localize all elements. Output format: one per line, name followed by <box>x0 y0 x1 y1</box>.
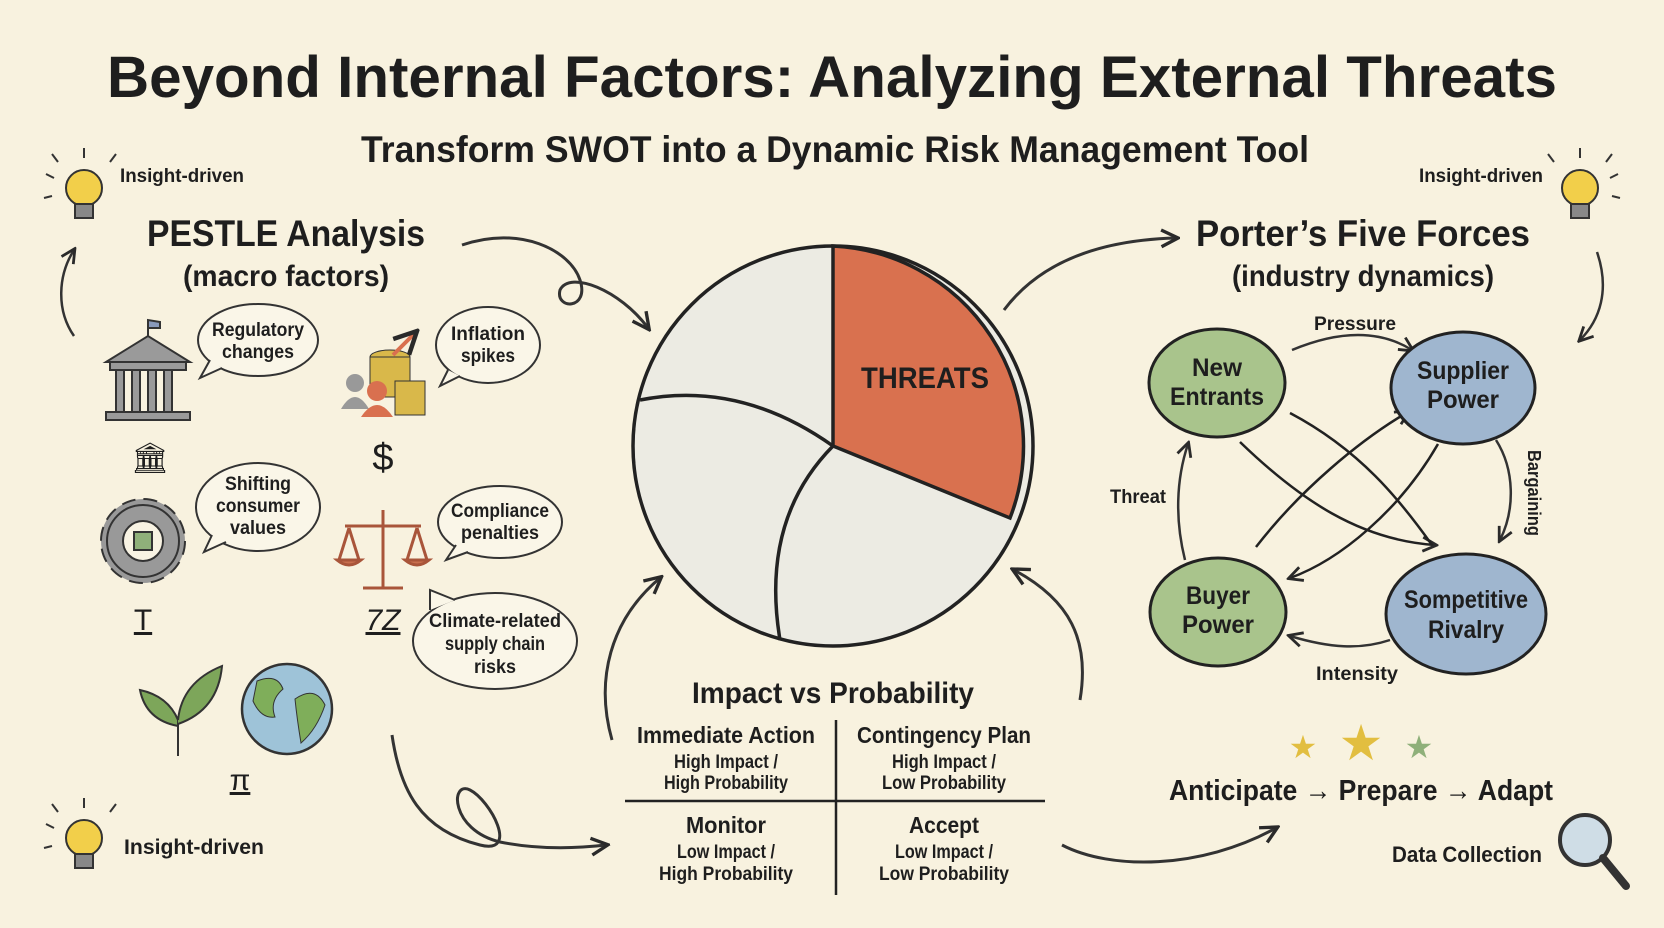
chart: SWOT circle: THREATS <box>861 362 989 395</box>
icon: globe <box>242 664 332 754</box>
arrow: left side up <box>61 250 74 336</box>
callout: regulatory: changes <box>222 342 294 363</box>
node: buyer power: Buyer <box>1186 582 1250 610</box>
icon: stars: ★ <box>1405 729 1433 765</box>
icon: bulb bottom-left <box>44 798 116 868</box>
chart: SWOT circle <box>633 246 1033 646</box>
node: buyer power: Power <box>1182 611 1254 639</box>
icon: coins and people <box>341 333 425 417</box>
heading: PESTLE: PESTLE Analysis <box>147 213 425 254</box>
panel: impact vs probability matrix: High Probability <box>659 864 793 885</box>
callout: regulatory <box>198 304 318 378</box>
arrow: circle to porter <box>1004 238 1176 310</box>
heading: PESTLE: (macro factors) <box>183 260 389 293</box>
node: new entrants <box>1149 329 1285 437</box>
callout: inflation spikes: spikes <box>461 346 515 367</box>
icon: stars: ★ <box>1339 715 1383 771</box>
callout: compliance: penalties <box>461 523 539 544</box>
node: new entrants: New <box>1192 354 1243 382</box>
heading: PESTLE <box>147 213 425 293</box>
callout: compliance: Compliance <box>451 501 549 522</box>
panel: impact vs probability matrix <box>625 677 1045 895</box>
callout: shifting consumer values <box>196 463 320 552</box>
icon: government building <box>106 320 190 420</box>
arrow: lower right up into circle <box>1014 570 1082 700</box>
panel: impact vs probability matrix: Low Probability <box>882 773 1006 794</box>
icon: bulb top-right <box>1548 148 1620 218</box>
panel: impact vs probability matrix: High Probability <box>664 773 788 794</box>
node: new entrants: Entrants <box>1170 383 1264 411</box>
callout: shifting consumer values: consumer <box>216 496 301 517</box>
icon: T symbol: T <box>134 604 152 637</box>
callout: climate: risks <box>474 657 516 678</box>
node: supplier power: Power <box>1427 386 1499 414</box>
icon: small building: 🏛 <box>131 442 169 475</box>
diagram: five forces: Bargaining <box>1524 450 1544 536</box>
panel: impact vs probability matrix: Low Impact / <box>677 842 776 863</box>
callout: climate <box>413 590 577 689</box>
callout: inflation spikes: Inflation <box>451 324 525 345</box>
node: supplier power <box>1391 332 1535 444</box>
panel: impact vs probability matrix: Low Impact / <box>895 842 994 863</box>
icon: law symbol: 7Z <box>365 604 402 637</box>
panel: impact vs probability matrix: Low Probability <box>879 864 1009 885</box>
icon: dollar: $ <box>372 437 394 479</box>
panel: impact vs probability matrix: Monitor <box>686 812 766 838</box>
diagram: five forces: Threat <box>1110 487 1167 508</box>
callout: shifting consumer values: values <box>230 518 286 539</box>
text: data collection: Data Collection <box>1392 842 1542 867</box>
diagram: five forces <box>1110 314 1546 685</box>
heading: porter: (industry dynamics) <box>1232 260 1494 293</box>
panel: impact vs probability matrix: High Impact / <box>892 752 997 773</box>
callout: climate: Climate-related <box>429 611 561 632</box>
title: Beyond Internal Factors: Analyzing External Threats <box>107 45 1557 110</box>
panel: impact vs probability matrix: Accept <box>909 812 979 838</box>
icon: pi symbol: π <box>230 764 250 797</box>
icon: stars: ★ <box>1289 729 1317 765</box>
panel: impact vs probability matrix: Immediate Action <box>637 722 815 748</box>
text: anticipate prepare adapt: Anticipate → Prepare → Adapt <box>1169 775 1553 807</box>
panel: impact vs probability matrix: High Impact / <box>674 752 779 773</box>
icon: gear <box>101 499 185 583</box>
arrow: right side down <box>1580 252 1603 340</box>
icon: leaves <box>140 666 222 756</box>
callout: compliance <box>438 486 562 560</box>
text: insight-driven top-right: Insight-driven <box>1419 166 1543 187</box>
node: competitive rivalry: Rivalry <box>1428 616 1504 644</box>
arrow: pestle down to matrix <box>392 735 606 848</box>
wedge: threats <box>833 246 1023 518</box>
subtitle: Transform SWOT into a Dynamic Risk Management Tool <box>361 129 1309 170</box>
diagram: five forces: Pressure <box>1314 314 1396 335</box>
node: buyer power <box>1150 558 1286 666</box>
callout: climate: supply chain <box>445 634 545 655</box>
panel: impact vs probability matrix: Contingency Plan <box>857 722 1031 748</box>
arrow: matrix to anticipate <box>1062 828 1276 862</box>
heading: porter <box>1196 213 1530 293</box>
icon: bulb top-left <box>44 148 116 218</box>
text: insight-driven top-left: Insight-driven <box>120 166 244 187</box>
icon: stars <box>1289 715 1433 771</box>
callout: regulatory: Regulatory <box>212 320 304 341</box>
text: insight-driven bottom-left: Insight-driven <box>124 836 264 859</box>
callout: inflation spikes <box>436 307 540 386</box>
arrow: pestle to circle <box>462 238 648 328</box>
icon: scales <box>337 510 429 588</box>
node: competitive rivalry <box>1386 554 1546 674</box>
diagram: five forces: Intensity <box>1316 664 1398 685</box>
node: competitive rivalry: Sompetitive <box>1404 586 1528 614</box>
node: supplier power: Supplier <box>1417 357 1509 385</box>
arrow: lower left up into circle <box>605 578 660 740</box>
heading: porter: Porter’s Five Forces <box>1196 213 1530 254</box>
callout: shifting consumer values: Shifting <box>225 474 291 495</box>
panel: impact vs probability matrix: Impact vs Probability <box>692 677 974 710</box>
icon: magnifier <box>1560 815 1626 886</box>
